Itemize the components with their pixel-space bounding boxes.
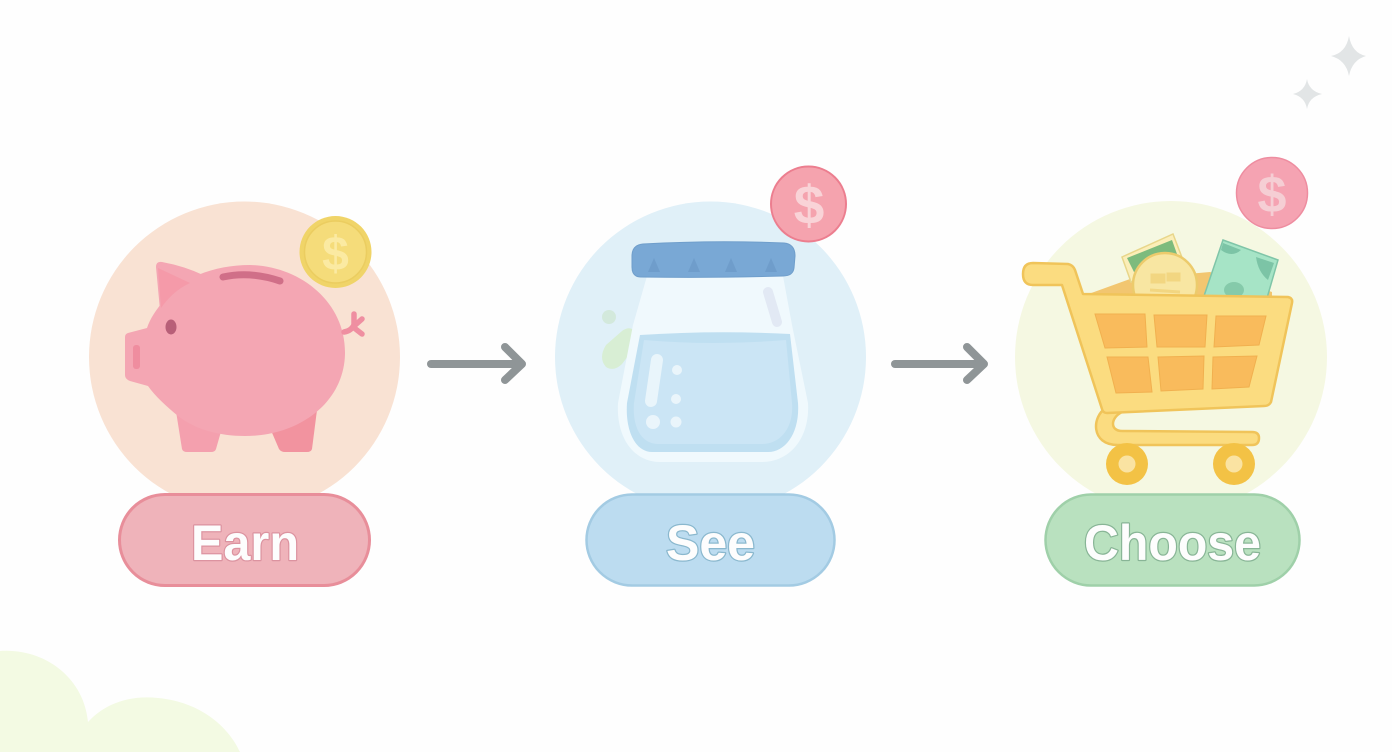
label pill: Earn <box>120 494 370 586</box>
icon: gold coin: $ <box>322 228 349 281</box>
icon: pink dollar badge: $ <box>794 174 824 236</box>
jar lid <box>632 242 795 277</box>
arrow: See to Choose <box>895 347 984 380</box>
icon: pink dollar badge <box>771 166 846 242</box>
cash: mint note <box>1204 240 1278 298</box>
icon: piggy bank <box>125 262 362 452</box>
cart lower frame and rail <box>1096 408 1259 445</box>
background circle: Earn <box>89 202 400 512</box>
cart right wheel <box>1213 443 1255 485</box>
cart windows <box>1095 314 1266 393</box>
icon: pink dollar badge: $ <box>1258 166 1287 224</box>
label pill: See <box>586 494 834 586</box>
icon: sparkles, top right <box>1293 36 1366 109</box>
jar highlight <box>651 360 657 401</box>
pig back leg <box>270 410 317 452</box>
icon: gold coin <box>300 216 372 288</box>
cart handle and basket <box>1023 263 1292 413</box>
panel: Choose <box>1015 158 1327 586</box>
pig inner ear <box>158 268 190 308</box>
background circle: See <box>555 202 866 512</box>
label pill: Choose <box>1046 494 1300 586</box>
jar reflection <box>768 292 777 322</box>
pig snout nostril <box>133 345 140 369</box>
jar water outer <box>627 332 798 452</box>
cart left wheel <box>1106 443 1148 485</box>
icon: shopping cart <box>1023 234 1292 485</box>
icon: pink dollar badge <box>1236 158 1308 228</box>
panel: Earn <box>89 202 400 586</box>
background circle: Choose <box>1015 201 1327 513</box>
jar lid notches <box>648 258 777 272</box>
cart contents backing <box>1083 272 1272 300</box>
jar water inner <box>634 340 792 444</box>
pig body <box>125 265 345 436</box>
icon: green splash <box>602 310 638 369</box>
label pill: Choose: Choose <box>1084 515 1261 571</box>
decorative cloud, bottom left <box>0 651 240 752</box>
pig front leg <box>175 405 222 452</box>
icon: glass jar <box>618 242 808 462</box>
jar glass <box>618 276 808 462</box>
pig eye <box>166 320 176 334</box>
label pill: See: See <box>666 515 755 571</box>
cash: green note <box>1122 234 1186 282</box>
arrow: Earn to See <box>431 347 522 380</box>
panel: See <box>555 166 866 586</box>
pig tail <box>344 314 362 334</box>
jar bubbles <box>646 365 682 429</box>
label pill: Earn: Earn <box>191 515 299 571</box>
pig coin slot <box>223 275 280 281</box>
coin in cart <box>1133 253 1197 317</box>
pig ear <box>156 262 203 312</box>
